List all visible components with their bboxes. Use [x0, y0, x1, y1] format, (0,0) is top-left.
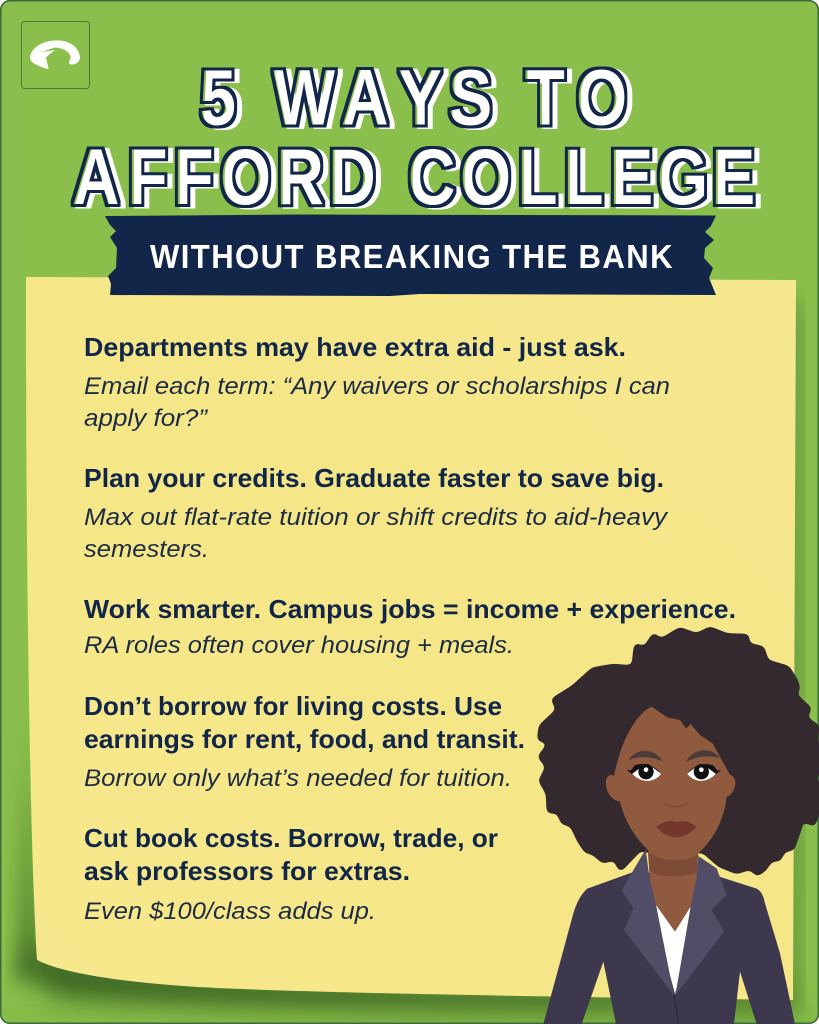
tip 4: Borrow only what’s needed for tuition. [84, 765, 512, 792]
tip 5: Even $100/class adds up. [84, 898, 376, 925]
tip 3: Work smarter. Campus jobs = income + experience. [84, 594, 736, 624]
character: woman in blazer [540, 629, 819, 1024]
jacket seam [674, 995, 679, 1024]
tip 4: earnings for rent, food, and transit. [84, 724, 525, 754]
title navy outline layer: AFFORD COLLEGE [72, 133, 755, 221]
nose [665, 803, 687, 807]
title white offset layer: AFFORD COLLEGE [77, 135, 760, 223]
tip 3: RA roles often cover housing + meals. [84, 632, 514, 659]
tip 5: ask professors for extras. [84, 856, 410, 886]
tip 1 [84, 332, 670, 432]
left eye [627, 764, 661, 781]
jacket [543, 873, 795, 1024]
tip 1: Departments may have extra aid - just ask. [84, 332, 626, 362]
lips [656, 821, 697, 837]
right eye [687, 764, 721, 781]
logo badge [22, 22, 90, 88]
tip 2: Plan your credits. Graduate faster to save big. [84, 463, 664, 493]
tip 4 [84, 691, 525, 792]
tip 1: apply for?” [84, 405, 209, 432]
tip 5: Cut book costs. Borrow, trade, or [84, 823, 498, 853]
title navy outline layer [72, 54, 755, 221]
ribbon banner [105, 214, 716, 296]
tip 4: Don’t borrow for living costs. Use [84, 691, 502, 721]
neck shadow [648, 853, 698, 876]
left lapel [622, 849, 674, 995]
title [72, 54, 760, 223]
icon: white swoosh [30, 40, 80, 69]
hair [540, 629, 819, 873]
tip 2 [84, 463, 669, 563]
face [606, 707, 735, 860]
sticky note paper [26, 277, 796, 1000]
tip 1: Email each term: “Any waivers or scholarships I can [84, 373, 670, 400]
brows [629, 750, 720, 763]
tip 5 [84, 823, 498, 925]
title white offset layer [77, 55, 760, 223]
tip 3 [84, 594, 736, 659]
title navy outline layer: 5 WAYS TO [199, 54, 627, 142]
tip 2: semesters. [84, 536, 209, 563]
title white offset layer: 5 WAYS TO [204, 55, 632, 143]
tip 2: Max out flat-rate tuition or shift credits to aid-heavy [84, 504, 669, 531]
neck [648, 850, 698, 932]
shirt [656, 905, 691, 994]
right lapel [675, 856, 727, 995]
subtitle: WITHOUT BREAKING THE BANK [150, 238, 674, 275]
